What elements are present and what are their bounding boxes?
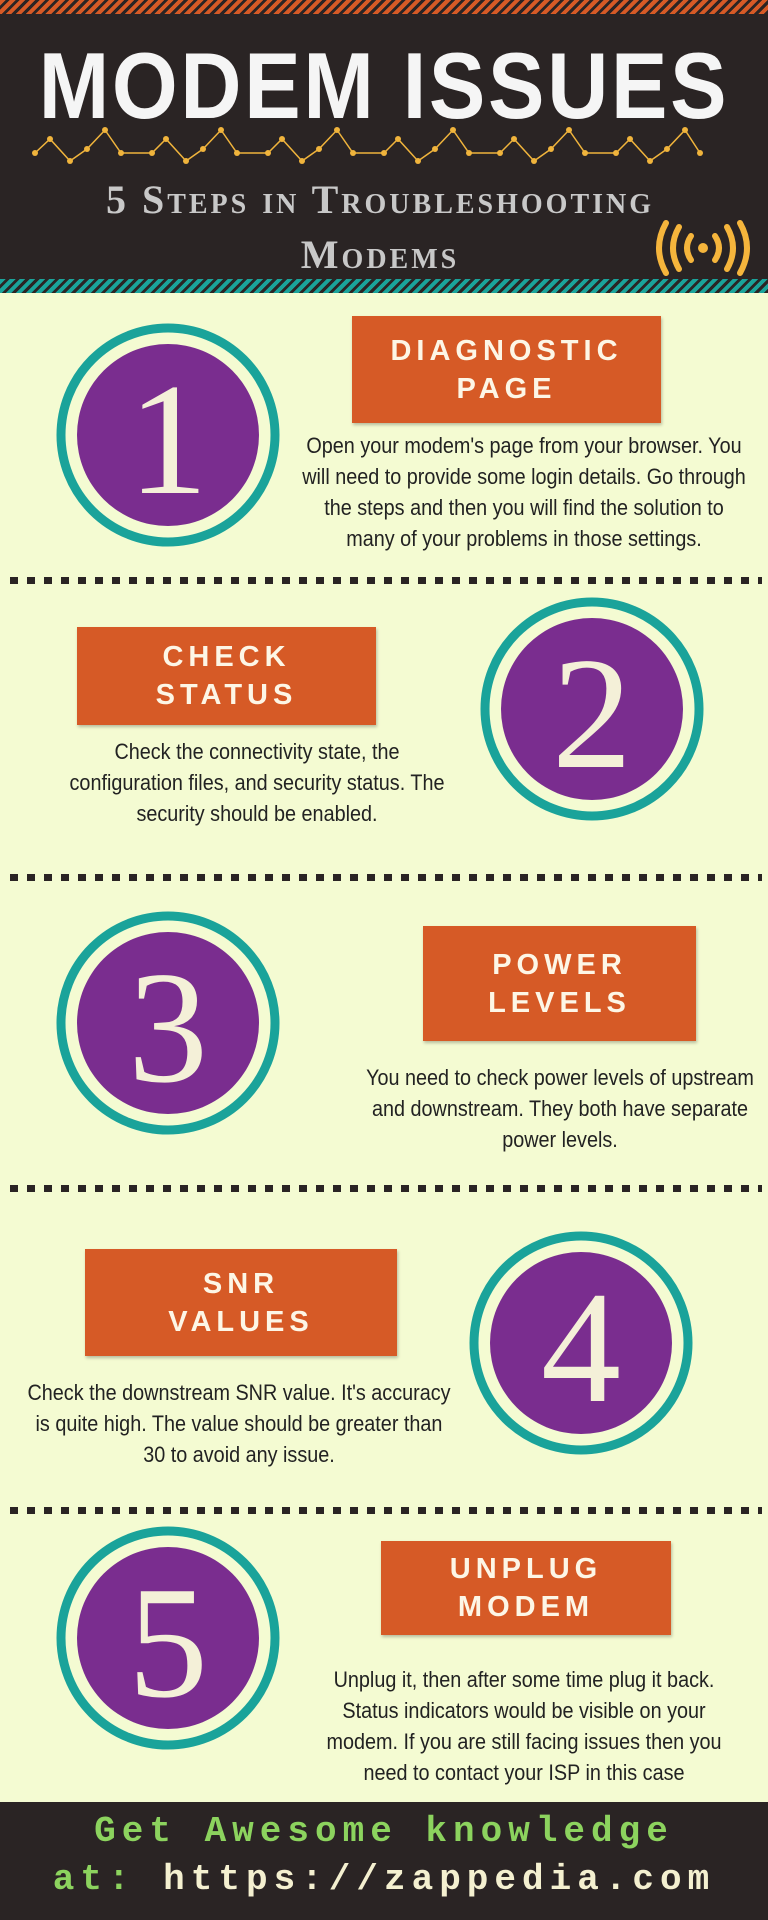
footer: at: https://zappedia.com [53, 1859, 715, 1900]
step 4 text: is quite high. The value should be greater than [36, 1411, 442, 1436]
zigzag decoration [32, 127, 703, 164]
step 2 circle: 2 [552, 624, 632, 802]
step 2 circle [480, 598, 704, 820]
step 5 circle: 5 [128, 1553, 208, 1731]
step 3 label: LEVELS [488, 986, 631, 1018]
step 4 text [27, 1380, 451, 1467]
subtitle: 5 Steps in Troubleshooting [106, 177, 654, 222]
header [0, 0, 768, 293]
step 3 circle: 3 [128, 938, 208, 1116]
step 3 text: You need to check power levels of upstream [366, 1065, 754, 1090]
step 5 circle [56, 1526, 280, 1750]
step 5 label: MODEM [458, 1591, 594, 1623]
step 5 text [326, 1667, 722, 1785]
step 4 label: SNR [203, 1268, 279, 1300]
step 2 text: Check the connectivity state, the [114, 739, 400, 764]
step 5 text: Status indicators would be visible on your [342, 1698, 706, 1723]
title: MODEM ISSUES [39, 33, 729, 138]
subtitle: Modems [301, 232, 459, 277]
step 1 label: PAGE [456, 372, 557, 404]
step 4 text: Check the downstream SNR value. It's accuracy [27, 1380, 451, 1405]
step 5 label [381, 1541, 671, 1635]
step 3 text: power levels. [502, 1127, 618, 1152]
step 2 label: STATUS [156, 679, 297, 711]
step 3 text: and downstream. They both have separate [372, 1096, 748, 1121]
subtitle [106, 177, 654, 277]
step 1 label [352, 316, 661, 423]
icon: wifi signal [656, 220, 750, 276]
step 1 circle [56, 324, 280, 546]
step 5 text: modem. If you are still facing issues then you [326, 1729, 722, 1754]
footer [0, 1802, 768, 1920]
step 1 text: the steps and then you will find the solution to [324, 495, 724, 520]
step 2 label: CHECK [162, 641, 291, 673]
step 4 circle: 4 [541, 1258, 621, 1436]
step 1 text: Open your modem's page from your browser. You [306, 433, 742, 458]
step 5 label: UNPLUG [450, 1553, 602, 1585]
step 5 text: Unplug it, then after some time plug it back. [334, 1667, 714, 1692]
step 4 label [85, 1249, 397, 1356]
step 1 text: many of your problems in those settings. [346, 526, 702, 551]
step 2 text: security should be enabled. [136, 801, 378, 826]
step 2 label [77, 627, 376, 725]
step 2 text: configuration files, and security status. The [70, 770, 444, 795]
step 1 circle: 1 [128, 350, 208, 528]
step 1 text [302, 433, 746, 551]
step 4 label: VALUES [168, 1306, 314, 1338]
step 2 text [70, 739, 444, 826]
step 4 text: 30 to avoid any issue. [143, 1442, 335, 1467]
step 3 label [423, 926, 696, 1041]
step 4 circle [470, 1232, 692, 1454]
step 3 circle [56, 912, 280, 1134]
step 1 text: will need to provide some login details. Go through [302, 464, 746, 489]
step 1 label: DIAGNOSTIC [390, 334, 623, 366]
step 5 text: need to contact your ISP in this case [363, 1760, 685, 1785]
footer: Get Awesome knowledge [94, 1811, 674, 1852]
step 3 label: POWER [492, 948, 627, 980]
step 3 text [366, 1065, 754, 1152]
